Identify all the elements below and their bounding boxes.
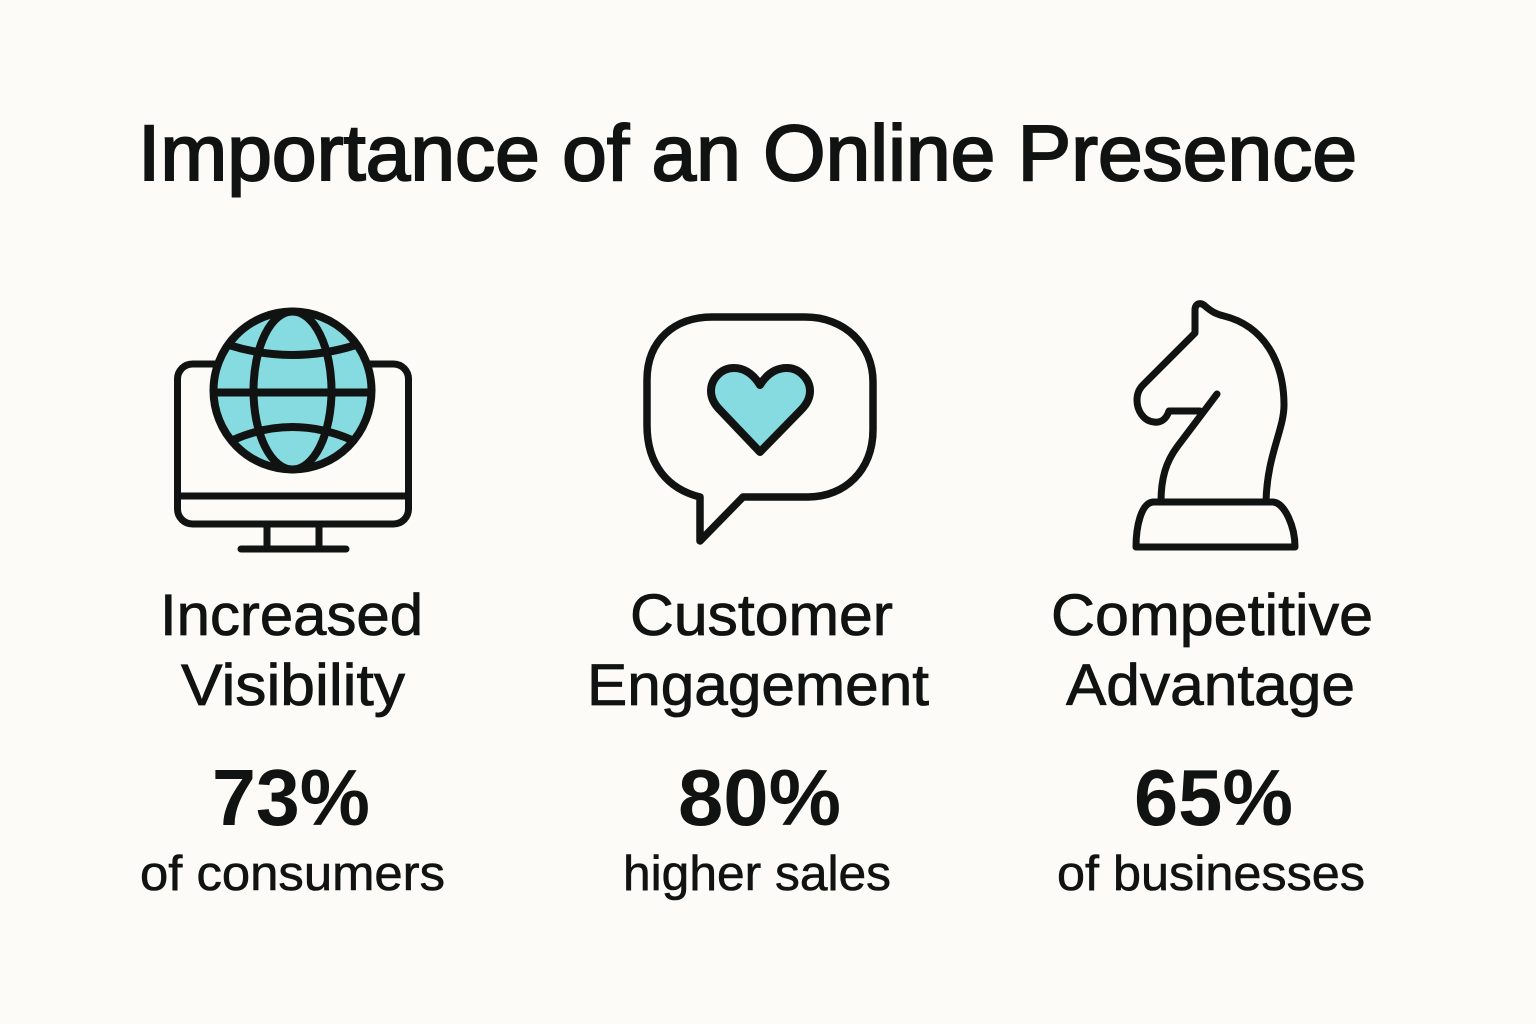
icon: heart: [711, 368, 810, 452]
heading: increased visibility: Visibility: [181, 653, 405, 718]
stat: 73% of consumers: 73%: [212, 753, 370, 842]
title: Importance of an Online Presence: [138, 108, 1357, 197]
stat: 80% higher sales: 80%: [678, 753, 841, 842]
icon: globe: [214, 312, 372, 470]
panel: increased visibility: [140, 312, 445, 901]
stat: 80% higher sales: higher sales: [623, 847, 891, 901]
heading: customer engagement: Customer: [630, 583, 893, 648]
heading: competitive advantage: Competitive: [1051, 583, 1373, 648]
heading: competitive advantage: Advantage: [1066, 653, 1355, 718]
icon: speech bubble: [647, 317, 873, 541]
panel: competitive advantage: [1051, 304, 1373, 901]
heading: competitive advantage: [1051, 583, 1373, 718]
icon: monitor: [178, 364, 408, 549]
stat: 65% of businesses: [1057, 753, 1365, 901]
panel: customer engagement: [587, 317, 929, 901]
icon: chess knight: [1136, 304, 1295, 547]
heading: customer engagement: [587, 583, 929, 718]
stat: 73% of consumers: [140, 753, 445, 901]
stat: 65% of businesses: 65%: [1134, 753, 1293, 842]
stat: 65% of businesses: of businesses: [1057, 847, 1365, 901]
heading: increased visibility: Increased: [160, 583, 423, 648]
stat: 80% higher sales: [623, 753, 891, 901]
icon: speech bubble with heart: [647, 317, 873, 541]
heading: customer engagement: Engagement: [587, 653, 929, 718]
stat: 73% of consumers: of consumers: [140, 847, 445, 901]
heading: increased visibility: [160, 583, 423, 718]
icon: monitor with globe: [178, 312, 408, 549]
